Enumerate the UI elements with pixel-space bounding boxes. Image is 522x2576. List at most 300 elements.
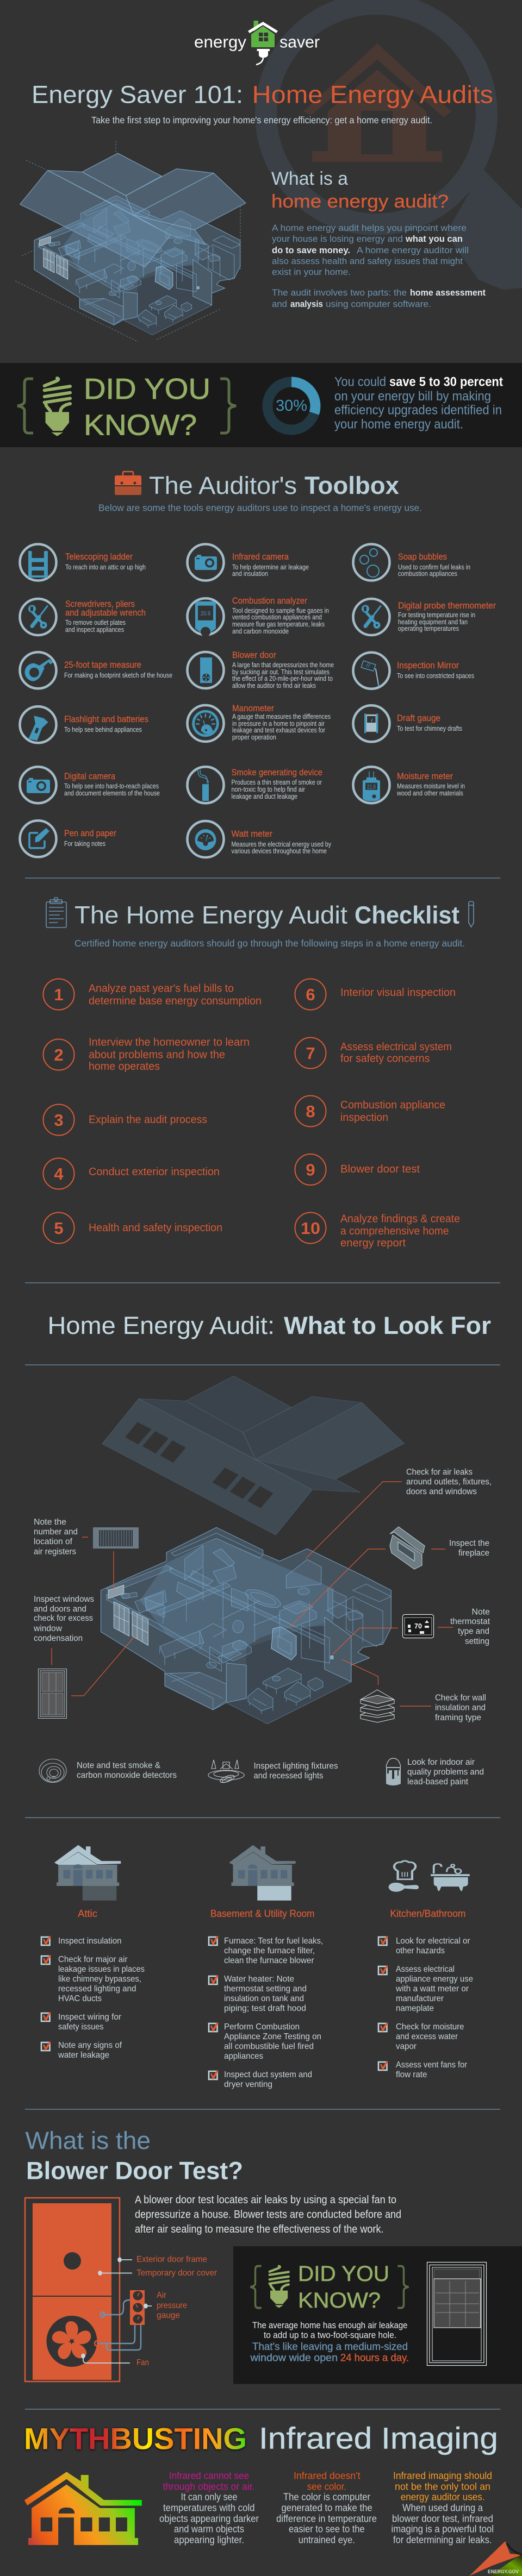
step 1 — [44, 979, 262, 1010]
checklist: attic: Inspect insulation — [58, 1936, 122, 1946]
tool: flashlight: Flashlight and batteries — [64, 714, 148, 724]
intro text: A home energy auditor will — [357, 246, 469, 255]
step 2: home operates — [89, 1061, 160, 1073]
tool: infrared camera: Infrared camera — [232, 551, 289, 562]
callout: air registers: Note the — [34, 1518, 66, 1527]
myth: infrared imaging not the only tool — [391, 2471, 494, 2546]
callout: windows: Inspect windows — [34, 1595, 94, 1604]
heading: mythbusting infrared imaging: Infrared Imaging — [259, 2421, 498, 2455]
item: smoke detectors — [39, 1759, 177, 1782]
step 1: determine base energy consumption — [89, 995, 262, 1007]
illustration: lifted roof — [102, 1376, 404, 1535]
tool: manometer: proper operation — [232, 733, 276, 741]
tool: draft gauge: Draft gauge — [397, 713, 440, 723]
checklist: basement: Water heater: Note — [224, 1975, 294, 1984]
tool: manometer — [187, 703, 331, 742]
tool: infrared camera — [187, 544, 309, 580]
tool: watt meter — [187, 821, 331, 857]
tool: blower door: A large fan that depressurizes the home — [232, 661, 334, 669]
heading: the auditor's toolbox: Toolbox — [304, 472, 399, 499]
tool: blower door: by sucking air out. This test simulates — [232, 668, 330, 676]
checklist: attic — [41, 1936, 145, 2060]
checklist: kitchen and bathroom: nameplate — [396, 2004, 434, 2013]
tool: blower door: the effect of a 20-mile-per-hour wind to — [232, 674, 333, 682]
checklist: kitchen and bathroom: manufacturer — [396, 1994, 444, 2003]
heading: mythbusting infrared imaging — [24, 2421, 498, 2456]
myth: infrared cannot see through objects — [159, 2471, 259, 2546]
checklist: attic: Note any signs of — [58, 2041, 122, 2050]
icon: bulb with braces — [250, 2266, 409, 2308]
heading: did you know: KNOW? — [84, 409, 197, 442]
step 5: Health and safety inspection — [89, 1222, 222, 1234]
callout: wall insulation: Check for wall — [435, 1694, 486, 1703]
checklist: kitchen and bathroom: Assess electrical — [396, 1965, 455, 1974]
step 6: Interior visual inspection — [340, 987, 456, 999]
text: air leakage fact — [250, 2321, 409, 2364]
myth: infrared doesn't see color: generated to make the — [282, 2503, 372, 2514]
tool: combustion analyzer: Tool designed to sample flue gases in — [232, 606, 329, 615]
icon: thermal house — [24, 2472, 142, 2546]
tool: watt meter: various devices throughout the home — [232, 847, 327, 855]
myth: infrared cannot see through objects: Infrared cannot see — [169, 2471, 249, 2481]
tool: flashlight — [20, 706, 148, 743]
checklist: kitchen and bathroom: Check for moisture — [396, 2022, 464, 2032]
tool: digital probe thermometer: Digital probe thermometer — [398, 600, 496, 611]
tool: watt meter: Watt meter — [232, 829, 272, 839]
tool: moisture meter: 21.8 — [367, 784, 376, 791]
tool: combustion analyzer — [187, 596, 329, 637]
tool: manometer: in pressure in a home to pinpoint air — [232, 719, 325, 728]
callout: wall insulation: framing type — [435, 1713, 481, 1722]
step 10: a comprehensive home — [340, 1225, 449, 1237]
tool: digital probe thermometer: heating equipment and fan — [398, 618, 468, 626]
callout: wall insulation — [342, 1659, 486, 1722]
logo: energy — [194, 33, 246, 51]
tool: combustion analyzer: vented combustion appliances and — [232, 613, 322, 621]
icon: attic house — [54, 1845, 121, 1901]
item: lighting fixtures: and recessed lights — [253, 1771, 324, 1781]
checklist heading: basement: Basement & Utility Room — [210, 1908, 314, 1919]
tool: watt meter: Measures the electrical energy used by — [232, 840, 331, 848]
callout: air leaks: around outlets, fixtures, — [406, 1477, 492, 1487]
label: exterior door frame — [81, 2255, 217, 2367]
title: Home Energy Audits — [252, 80, 493, 109]
intro text: and — [272, 299, 287, 309]
checklist: basement: appliances — [224, 2052, 263, 2061]
tool: digital probe thermometer: For testing temperature rise in — [398, 611, 475, 619]
step 7 — [295, 1038, 452, 1068]
icon: chef hat, spoon and bathtub — [388, 1861, 470, 1892]
step 1: Analyze past year's fuel bills to — [89, 982, 234, 994]
step 6 — [295, 979, 456, 1010]
heading: the auditor's toolbox: The Auditor's — [149, 472, 297, 499]
tool: smoke generating device — [187, 767, 322, 803]
checklist: kitchen and bathroom: appliance energy use — [396, 1975, 473, 1984]
callout: fireplace: fireplace — [458, 1549, 489, 1558]
label: exterior door frame: Exterior door frame — [136, 2255, 207, 2264]
tool: flashlight: To help see behind appliances — [64, 725, 142, 734]
tool: smoke generating device: leakage and duct leakage — [232, 792, 297, 800]
heading: did you know: KNOW? — [298, 2289, 381, 2312]
gauge panel — [130, 2290, 145, 2325]
tool: tape measure — [20, 652, 172, 688]
intro text: The audit involves two parts: the — [272, 288, 407, 298]
logo: saver — [279, 33, 320, 51]
step 10: 10 — [301, 1219, 320, 1238]
step 6: 6 — [306, 985, 315, 1004]
tool: soap bubbles — [353, 544, 470, 580]
tool: smoke generating device: Smoke generating device — [232, 767, 322, 778]
heading: did you know: DID YOU — [298, 2262, 389, 2286]
label: exterior door frame: Air — [157, 2291, 167, 2300]
tool: blower door: Blower door — [232, 650, 276, 660]
checklist: basement: all combustible fuel fired — [224, 2042, 314, 2051]
step 3: Explain the audit process — [89, 1114, 207, 1126]
text: air leakage fact: window wide open — [250, 2353, 338, 2364]
tool: digital probe thermometer: operating temperatures — [398, 624, 459, 632]
tool: pen and paper: Pen and paper — [64, 828, 116, 838]
item: smoke detectors: Note and test smoke & — [77, 1761, 161, 1770]
checklist: basement: Perform Combustion — [224, 2022, 300, 2032]
checklist: basement: Inspect duct system and — [224, 2070, 312, 2079]
tool: moisture meter: wood and other materials — [396, 789, 463, 797]
step 5 — [44, 1213, 222, 1243]
tool: infrared camera: and insulation — [232, 569, 268, 578]
myth: infrared imaging not the only tool: for determining air leaks. — [393, 2535, 492, 2546]
step 4: Conduct exterior inspection — [89, 1166, 220, 1178]
heading: mythbusting infrared imaging: MYTHBUSTING — [24, 2422, 247, 2456]
myth: infrared doesn't see color: see color. — [307, 2481, 346, 2492]
checklist: basement: Furnace: Test for fuel leaks, — [224, 1936, 323, 1946]
text: air leakage fact: That's like leaving a medium-sized — [252, 2341, 408, 2353]
chart: 30 percent donut: 30% — [276, 397, 307, 415]
chart: 30 percent donut — [268, 382, 315, 430]
tool: tape measure: 25-foot tape measure — [64, 660, 141, 670]
tool: inspection mirror — [353, 653, 474, 689]
myth: infrared cannot see through objects: objects appearing darker — [159, 2514, 259, 2524]
myth: infrared doesn't see color: untrained eye. — [299, 2535, 355, 2546]
step 9: Blower door test — [340, 1163, 420, 1175]
callout: thermostat — [333, 1607, 490, 1654]
heading: what is a home energy audit — [271, 168, 449, 212]
heading: did you know: DID YOU — [84, 373, 210, 405]
tool: screwdrivers and wrench: Screwdrivers, pliers — [65, 599, 135, 609]
callout: thermostat: thermostat — [450, 1617, 490, 1626]
myth: infrared cannot see through objects: It can only see — [181, 2492, 237, 2503]
heading: did you know — [84, 373, 210, 442]
text: savings fact — [334, 375, 503, 432]
tool: pen and paper — [20, 820, 116, 857]
checklist: kitchen and bathroom: other hazards — [396, 1946, 445, 1955]
tool: moisture meter: Measures moisture level in — [397, 782, 465, 790]
text: air leakage fact: 24 hours a day. — [340, 2353, 409, 2364]
callout: air registers: number and — [34, 1527, 78, 1537]
tool: digital camera — [20, 767, 160, 803]
checklist: kitchen and bathroom — [378, 1936, 473, 2079]
callout: windows: window — [33, 1624, 63, 1633]
item: paint can air quality — [386, 1758, 484, 1787]
myth: infrared doesn't see color: easier to see to the — [289, 2524, 365, 2535]
text: blower door description: after air sealing to measure the effectiveness of the work. — [135, 2223, 384, 2235]
tool: pen and paper: For taking notes — [64, 839, 105, 848]
tubes — [95, 2300, 141, 2350]
tool: soap bubbles: combustion appliances — [398, 569, 457, 578]
icon: fan — [47, 2316, 97, 2367]
item: lighting fixtures — [208, 1760, 338, 1784]
icon: clipboard — [46, 898, 66, 927]
icon: toolbox — [115, 472, 141, 495]
step 5: 5 — [54, 1219, 64, 1238]
checklist: kitchen and bathroom: Assess vent fans for — [396, 2060, 468, 2070]
checklist: attic: leakage issues in places — [58, 1965, 145, 1974]
step 3: 3 — [54, 1111, 64, 1130]
callout: air leaks: Check for air leaks — [406, 1468, 473, 1477]
item: smoke detectors: carbon monoxide detectors — [77, 1771, 177, 1780]
step 2: 2 — [54, 1045, 64, 1064]
intro text: exist in your home. — [272, 267, 351, 277]
checklist: attic: water leakage — [58, 2051, 109, 2060]
checklist: basement: insulation on tank and — [224, 1994, 304, 2003]
text: air leakage fact: The average home has enough air leakage — [252, 2321, 408, 2330]
myth: infrared imaging not the only tool: blower door test, infrared — [392, 2514, 493, 2524]
callout: fireplace — [290, 1527, 489, 1627]
tool: screwdrivers and wrench: To remove outlet plates — [65, 618, 126, 626]
tool: manometer: A gauge that measures the differences — [232, 712, 331, 720]
panel: did you know band — [0, 363, 522, 447]
step 2 — [44, 1037, 250, 1073]
tool: screwdrivers and wrench: and adjustable wrench — [65, 607, 146, 618]
checklist: attic: Check for major air — [58, 1955, 128, 1964]
tool: telescoping ladder — [20, 544, 146, 580]
step 8 — [295, 1095, 445, 1127]
callout: windows: and doors and — [34, 1604, 86, 1614]
callout: air leaks: doors and windows — [406, 1487, 477, 1496]
step 1: 1 — [54, 985, 64, 1004]
label: exterior door frame: Temporary door cover — [136, 2268, 217, 2278]
callout: windows: check for excess — [34, 1614, 93, 1623]
text: toolbox intro: Below are some the tools energy auditors use to inspect a home's energy use. — [98, 503, 422, 513]
tool: combustion analyzer: measure flue gas temperature, leaks — [232, 620, 325, 628]
intro text: what you can — [405, 234, 463, 244]
step 8: Combustion appliance — [340, 1099, 445, 1111]
checklist: attic: like chimney bypasses, — [58, 1975, 141, 1984]
text: air leakage fact: to add up to a two-foot-square hole. — [264, 2330, 396, 2340]
callout: air registers: air registers — [34, 1547, 76, 1557]
step 10: energy report — [340, 1237, 406, 1249]
title: Energy Saver 101: — [32, 80, 243, 109]
heading: checklist: Checklist — [355, 901, 459, 929]
tool: manometer: leakage and test exhaust devices for — [232, 726, 326, 734]
checklist: attic: recessed lighting and — [58, 1984, 136, 1994]
panel: did you know air leakage — [233, 2246, 522, 2384]
intro text: your house is losing energy and — [272, 234, 403, 244]
step 2: about problems and how the — [89, 1049, 225, 1061]
myth: infrared imaging not the only tool: imaging is a powerful tool — [391, 2524, 494, 2535]
callout: air registers: location of — [34, 1537, 73, 1546]
step 9 — [295, 1154, 420, 1185]
item: paint can air quality: Look for indoor air — [407, 1758, 475, 1767]
page curl with energy.gov: ENERGY.GOV — [488, 2569, 519, 2575]
myth: infrared doesn't see color: The color is computer — [283, 2492, 370, 2503]
checklist: basement — [209, 1936, 323, 2089]
myth: infrared imaging not the only tool: not be the only tool an — [395, 2481, 490, 2492]
heading: what is the blower door test: Blower Door Test? — [26, 2157, 243, 2185]
heading: did you know — [298, 2262, 389, 2312]
tool: soap bubbles: Soap bubbles — [398, 551, 447, 562]
step 8: inspection — [340, 1112, 388, 1124]
tool: moisture meter: Moisture meter — [397, 771, 453, 781]
illustration: house cutaway with rooms — [101, 1527, 391, 1723]
heading: what to look for — [48, 1312, 491, 1339]
heading: checklist: The Home Energy Audit — [74, 901, 348, 929]
checklist: basement: clean the furnace blower — [224, 1956, 314, 1965]
tool: inspection mirror: To see into constricted spaces — [397, 672, 474, 680]
tool: digital probe thermometer — [353, 599, 496, 635]
checklist: kitchen and bathroom: vapor — [396, 2042, 417, 2051]
tool: draft gauge: To test for chimney drafts — [397, 724, 462, 732]
checklist: kitchen and bathroom: flow rate — [396, 2070, 427, 2079]
tool: digital camera: Digital camera — [64, 771, 115, 781]
callout: windows — [33, 1595, 135, 1718]
icon: bulb with braces — [17, 378, 236, 436]
myth: infrared imaging not the only tool: energy auditor uses. — [401, 2492, 485, 2503]
step 10: Analyze findings & create — [340, 1213, 460, 1225]
tool: digital camera: To help see into hard-to-reach places — [64, 782, 159, 790]
callout: wall insulation: insulation and — [435, 1703, 486, 1713]
tool: soap bubbles: Used to confirm fuel leaks in — [398, 563, 470, 571]
logo — [194, 21, 320, 65]
heading: the auditor's toolbox — [115, 472, 399, 499]
step 3 — [44, 1104, 207, 1136]
tool: manometer: Manometer — [232, 703, 274, 713]
label: exterior door frame: Fan — [136, 2358, 149, 2367]
text: savings fact: You could — [334, 375, 386, 390]
icon: basement house — [229, 1845, 296, 1901]
text: savings fact: on your energy bill by making — [334, 389, 491, 404]
tool: blower door — [187, 650, 334, 690]
step 8: 8 — [306, 1102, 315, 1121]
tool: draft gauge — [353, 705, 462, 742]
myth: infrared cannot see through objects: temperatures with cold — [163, 2503, 254, 2514]
text: blower door description: depressurize a house. Blower tests are conducted before and — [135, 2209, 401, 2221]
heading: what to look for: Home Energy Audit: — [48, 1312, 275, 1339]
callout: windows: condensation — [34, 1634, 83, 1643]
tool: moisture meter — [353, 767, 465, 803]
tool: digital camera: and document elements of the house — [64, 789, 160, 797]
intro text: also assess health and safety issues that might — [272, 256, 463, 266]
text: checklist intro: Certified home energy auditors should go through the following steps in a home energy audit. — [74, 938, 465, 949]
intro text — [272, 223, 486, 309]
tool: telescoping ladder: Telescoping ladder — [65, 551, 133, 562]
callout: fireplace: Inspect the — [449, 1539, 489, 1548]
tool: screwdrivers and wrench: and inspect appliances — [65, 625, 124, 634]
heading: checklist — [46, 898, 474, 929]
checklist heading: attic: Attic — [78, 1908, 97, 1919]
myth: infrared cannot see through objects: through objects or air. — [163, 2481, 254, 2492]
myth: infrared cannot see through objects: appearing lighter. — [174, 2535, 244, 2546]
icon: pencil — [469, 901, 474, 927]
checklist: basement: piping; test draft hood — [224, 2004, 306, 2013]
text: blower door description: A blower door test locates air leaks by using a special fan to — [135, 2194, 396, 2206]
tool: infrared camera: To help determine air leakage — [232, 563, 309, 571]
heading: what is a home energy audit: What is a — [271, 168, 348, 189]
callout: air registers — [34, 1518, 139, 1589]
icon: open window — [427, 2262, 486, 2366]
myth: infrared doesn't see color: difference in temperature — [276, 2514, 377, 2524]
heading: what to look for: What to Look For — [284, 1312, 491, 1339]
tool: combustion analyzer: Combustion analyzer — [232, 596, 307, 606]
watermark: magnifying glass over house — [266, 4, 522, 290]
myth: infrared cannot see through objects: and warm objects — [174, 2524, 244, 2535]
tool: combustion analyzer: and carbon monoxide — [232, 627, 289, 635]
item: lighting fixtures: Inspect lighting fixtures — [253, 1762, 338, 1771]
tool: blower door: allow the auditor to find air leaks — [232, 681, 316, 690]
tool: smoke generating device: Produces a thin stream of smoke or — [232, 778, 322, 786]
intro text: do to save money. — [272, 246, 350, 255]
title — [32, 80, 493, 109]
myth: infrared doesn't see color — [276, 2471, 377, 2546]
checklist: attic: HVAC ducts — [58, 1994, 102, 2003]
callout: thermostat: type and — [458, 1627, 489, 1636]
text: blower door description — [135, 2194, 401, 2235]
page curl with energy.gov — [469, 2541, 522, 2576]
checklist: basement: change the furnace filter, — [224, 1946, 315, 1955]
checklist: basement: thermostat setting and — [224, 1984, 307, 1994]
myth: infrared imaging not the only tool: When used during a — [402, 2503, 483, 2514]
step 10 — [295, 1213, 460, 1249]
tool: inspection mirror: Inspection Mirror — [397, 660, 459, 670]
callout: air leaks — [306, 1468, 492, 1558]
step 7: 7 — [306, 1044, 315, 1063]
heading: what is a home energy audit: home energy audit? — [271, 191, 449, 212]
intro text: home assessment — [410, 288, 486, 298]
myth: infrared imaging not the only tool: Infrared imaging should — [393, 2471, 492, 2481]
text: savings fact: efficiency upgrades identified in — [334, 403, 502, 418]
item: paint can air quality: quality problems and — [407, 1768, 484, 1777]
intro text: analysis — [290, 299, 323, 309]
intro text: A home energy audit helps you pinpoint where — [272, 223, 467, 233]
step 7: for safety concerns — [340, 1053, 430, 1065]
house cutaway illustration — [15, 141, 246, 342]
step 4 — [44, 1158, 220, 1189]
callout: thermostat: setting — [465, 1637, 489, 1646]
label: exterior door frame: pressure — [157, 2301, 187, 2310]
text: savings fact: save 5 to 30 percent — [389, 375, 503, 390]
checklist: attic: safety issues — [58, 2022, 103, 2032]
step 9: 9 — [306, 1161, 315, 1179]
checklist: basement: Appliance Zone Testing on — [224, 2032, 321, 2041]
text: savings fact: your home energy audit. — [334, 417, 463, 432]
callout: thermostat: Note — [472, 1607, 490, 1617]
tool: screwdrivers and wrench — [20, 599, 146, 635]
step 2: Interview the homeowner to learn — [89, 1037, 250, 1049]
callout: thermostat: 70 — [414, 1622, 422, 1630]
checklist: kitchen and bathroom: and excess water — [396, 2032, 458, 2041]
myth: infrared doesn't see color: Infrared doesn't — [294, 2471, 361, 2481]
heading: what is the blower door test — [25, 2127, 243, 2185]
subtitle: Take the first step to improving your home's energy efficiency: get a home energy audit. — [91, 115, 432, 126]
checklist: kitchen and bathroom: with a watt meter or — [395, 1984, 469, 1994]
item: paint can air quality: lead-based paint — [407, 1777, 469, 1787]
tool: smoke generating device: non-toxic fog to help find air — [232, 785, 306, 793]
checklist: kitchen and bathroom: Look for electrical or — [396, 1936, 470, 1946]
label: exterior door frame: gauge — [157, 2311, 180, 2320]
diagram: blower door — [25, 2198, 217, 2381]
checklist: basement: dryer venting — [224, 2080, 272, 2089]
step 4: 4 — [54, 1164, 64, 1183]
intro text: using computer software. — [326, 299, 431, 309]
checklist heading: kitchen: Kitchen/Bathroom — [390, 1908, 465, 1919]
